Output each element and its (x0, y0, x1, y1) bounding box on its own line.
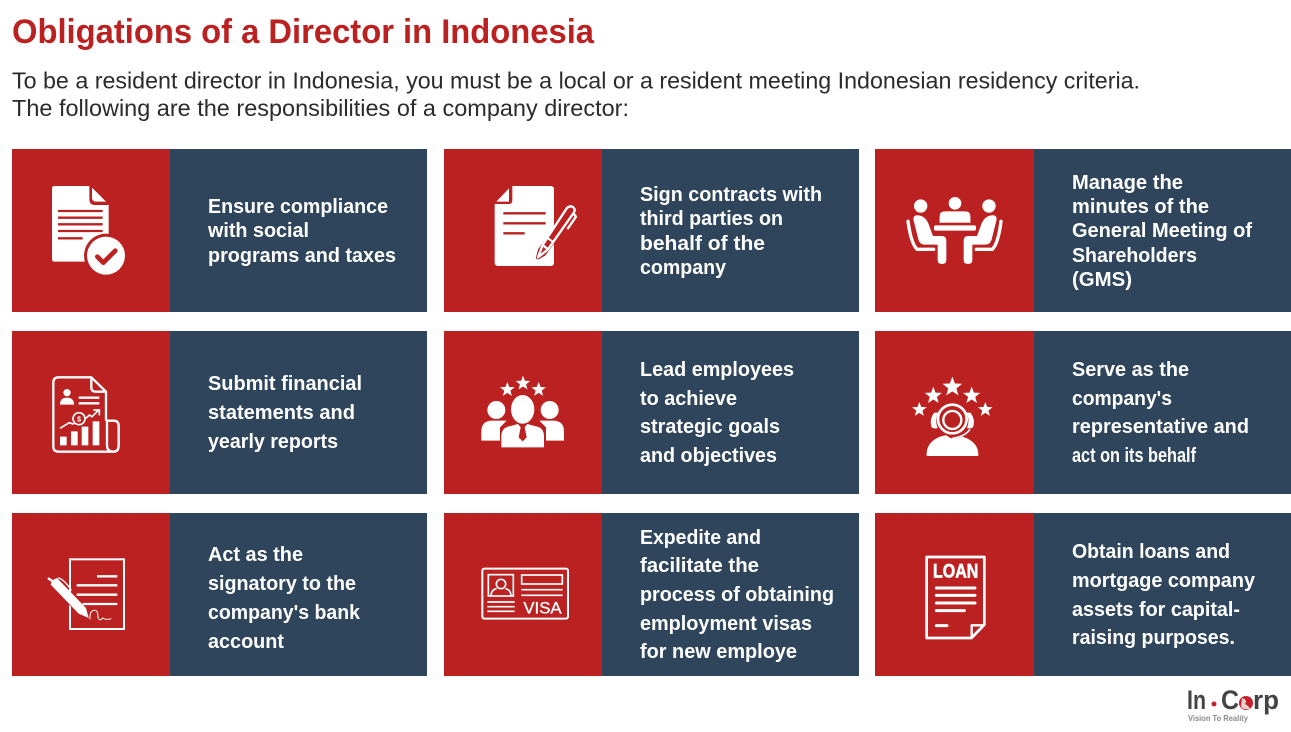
text: financial statements: Submit financial (208, 373, 362, 395)
panel: loans and mortgage (875, 513, 1291, 676)
text: ensure compliance (207, 196, 396, 267)
icon: loan document: LOAN (933, 562, 978, 583)
panel: employment visas (444, 513, 859, 676)
logo: InCorp: In (1187, 685, 1206, 715)
text: sign contracts: company (640, 257, 727, 279)
text: manage minutes: (GMS) (1072, 269, 1132, 291)
intro text: To be a resident director in Indonesia, you must be a local or a resident meeting Indonesian residency criteria. (12, 68, 1140, 94)
text: company representative: Serve as the (1072, 359, 1189, 381)
text: lead employees: to achieve (640, 388, 737, 410)
icon: team with stars (481, 376, 564, 447)
text: sign contracts (640, 184, 822, 279)
panel: sign contracts (444, 149, 859, 312)
text: manage minutes (1072, 172, 1252, 291)
icon: representative with stars (912, 377, 993, 456)
text: manage minutes: General Meeting of (1072, 220, 1252, 242)
text: ensure compliance: Ensure compliance (208, 196, 388, 218)
icon: visa card: VISA (523, 598, 563, 617)
text: manage minutes: Shareholders (1072, 245, 1197, 267)
text: bank signatory (208, 544, 361, 653)
panel: financial statements (12, 331, 427, 494)
icon: signed document and pen (49, 559, 124, 629)
text: employment visas: facilitate the (640, 555, 759, 577)
text: financial statements (208, 373, 362, 453)
text: employment visas (640, 527, 834, 663)
logo: InCorp: Vision To Reality (1188, 713, 1248, 723)
text: company representative: representative and (1072, 416, 1249, 438)
icon: visa card (482, 569, 568, 619)
text: lead employees (640, 359, 794, 467)
text: company representative (1072, 359, 1249, 467)
intro text: The following are the responsibilities of a company director: (12, 95, 629, 121)
logo: InCorp: C (1221, 685, 1239, 715)
text: lead employees: strategic goals (640, 416, 780, 438)
text: employment visas: Expedite and (640, 527, 761, 549)
text: loans and mortgage (1072, 541, 1256, 649)
text: loans and mortgage: assets for capital- (1072, 599, 1240, 621)
icon: meeting at a table (908, 197, 1001, 264)
text: sign contracts: third parties on (640, 208, 783, 230)
logo: InCorp: rp (1253, 685, 1279, 715)
text: company representative: company's (1072, 388, 1172, 410)
logo: InCorp (1187, 685, 1279, 723)
panel: lead employees (444, 331, 859, 494)
icon: financial report (53, 377, 119, 452)
panel: ensure compliance (12, 149, 427, 312)
icon: document with check mark (52, 186, 128, 278)
text: bank signatory: company's bank (208, 602, 361, 624)
text: lead employees: and objectives (640, 445, 777, 467)
text: sign contracts: Sign contracts with (640, 184, 822, 206)
text: employment visas: for new employe (640, 641, 797, 663)
panel: bank signatory (12, 513, 427, 676)
title: Obligations of a Director in Indonesia (12, 13, 595, 51)
icon: loan document (927, 557, 984, 638)
text: loans and mortgage: mortgage company (1072, 570, 1256, 592)
text: company representative: act on its behalf (1072, 445, 1196, 467)
text: employment visas: employment visas (640, 613, 812, 635)
panel: manage minutes (875, 149, 1291, 312)
panel: company representative (875, 331, 1291, 494)
text: financial statements: yearly reports (208, 431, 338, 453)
text: financial statements: statements and (208, 402, 355, 424)
text: manage minutes: minutes of the (1072, 196, 1209, 218)
text: loans and mortgage: raising purposes. (1072, 627, 1235, 649)
text: sign contracts: behalf of the (640, 233, 765, 255)
text: bank signatory: signatory to the (208, 573, 356, 595)
text: lead employees: Lead employees (640, 359, 794, 381)
text: loans and mortgage: Obtain loans and (1072, 541, 1230, 563)
text: manage minutes: Manage the (1072, 172, 1183, 194)
text: bank signatory: Act as the (208, 544, 303, 566)
text: ensure compliance: with social (207, 220, 309, 242)
text: ensure compliance: programs and taxes (208, 245, 396, 267)
text: bank signatory: account (208, 631, 284, 653)
icon: contract and pen (495, 186, 576, 266)
icon: financial report: $ (77, 414, 81, 423)
intro text (12, 68, 1140, 121)
text: employment visas: process of obtaining (640, 584, 834, 606)
